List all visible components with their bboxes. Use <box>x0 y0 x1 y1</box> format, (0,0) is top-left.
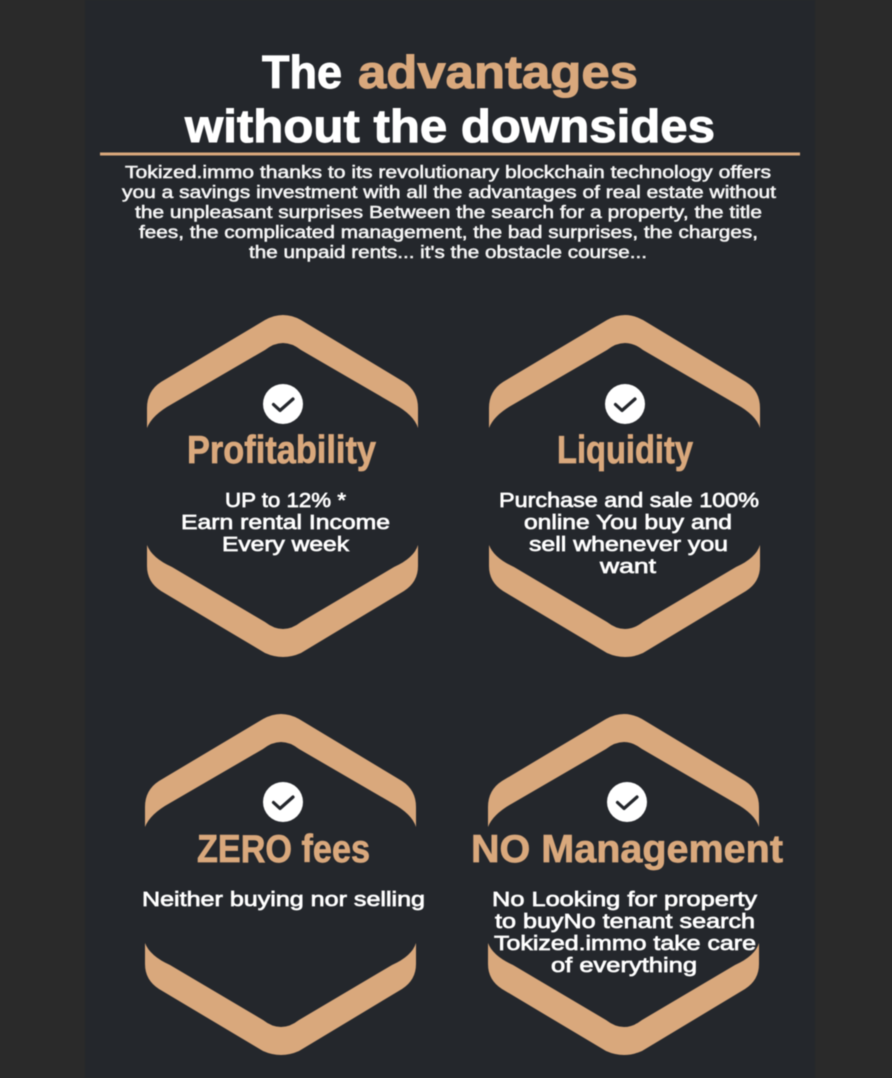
panel: NO Management <box>471 714 783 1055</box>
panel: Profitability <box>147 315 418 657</box>
panel: Liquidity <box>489 315 760 657</box>
title <box>184 46 715 152</box>
icon: check <box>263 384 303 424</box>
description: Tokized.immo take care <box>494 932 756 955</box>
hexagon bottom band <box>147 545 418 657</box>
hexagon top band <box>147 315 418 428</box>
description <box>181 489 390 556</box>
description: online You buy and <box>524 511 732 534</box>
intro text block: fees, the complicated management, the bad surprises, the charges, <box>139 222 758 242</box>
intro text block: Tokized.immo thanks to its revolutionary blockchain technology offers <box>125 162 771 182</box>
intro text block <box>122 162 776 262</box>
description: of everything <box>551 954 697 977</box>
heading: NO Management <box>471 828 783 871</box>
heading: Profitability <box>187 429 376 472</box>
panel: ZERO fees <box>142 714 425 1055</box>
icon: check <box>605 384 645 424</box>
title: The <box>262 46 342 98</box>
description: Every week <box>222 533 350 556</box>
hexagon top band <box>488 714 759 827</box>
icon: check <box>607 782 647 822</box>
description: Neither buying nor selling <box>142 888 425 911</box>
hexagon bottom band <box>489 545 760 657</box>
intro text block: you a savings investment with all the advantages of real estate without <box>122 182 776 202</box>
heading: Liquidity <box>557 429 693 472</box>
hexagon bottom band <box>488 943 759 1055</box>
hexagon bottom band <box>145 943 416 1055</box>
title: advantages <box>358 46 638 98</box>
description <box>492 888 758 977</box>
description <box>499 489 759 578</box>
description: UP to 12% * <box>225 489 346 512</box>
intro text block: the unpaid rents... it's the obstacle course... <box>249 242 647 262</box>
title: without the downsides <box>184 100 715 152</box>
description: Purchase and sale 100% <box>499 489 759 512</box>
intro text block: the unpleasant surprises Between the search for a property, the title <box>135 202 762 222</box>
description: No Looking for property <box>492 888 758 911</box>
description: sell whenever you <box>529 533 728 556</box>
hexagon top band <box>145 714 416 827</box>
description: to buyNo tenant search <box>495 910 755 933</box>
icon: check <box>263 782 303 822</box>
heading: ZERO fees <box>197 828 370 871</box>
hexagon top band <box>489 315 760 428</box>
description: Earn rental Income <box>181 511 390 534</box>
description: want <box>599 555 656 578</box>
